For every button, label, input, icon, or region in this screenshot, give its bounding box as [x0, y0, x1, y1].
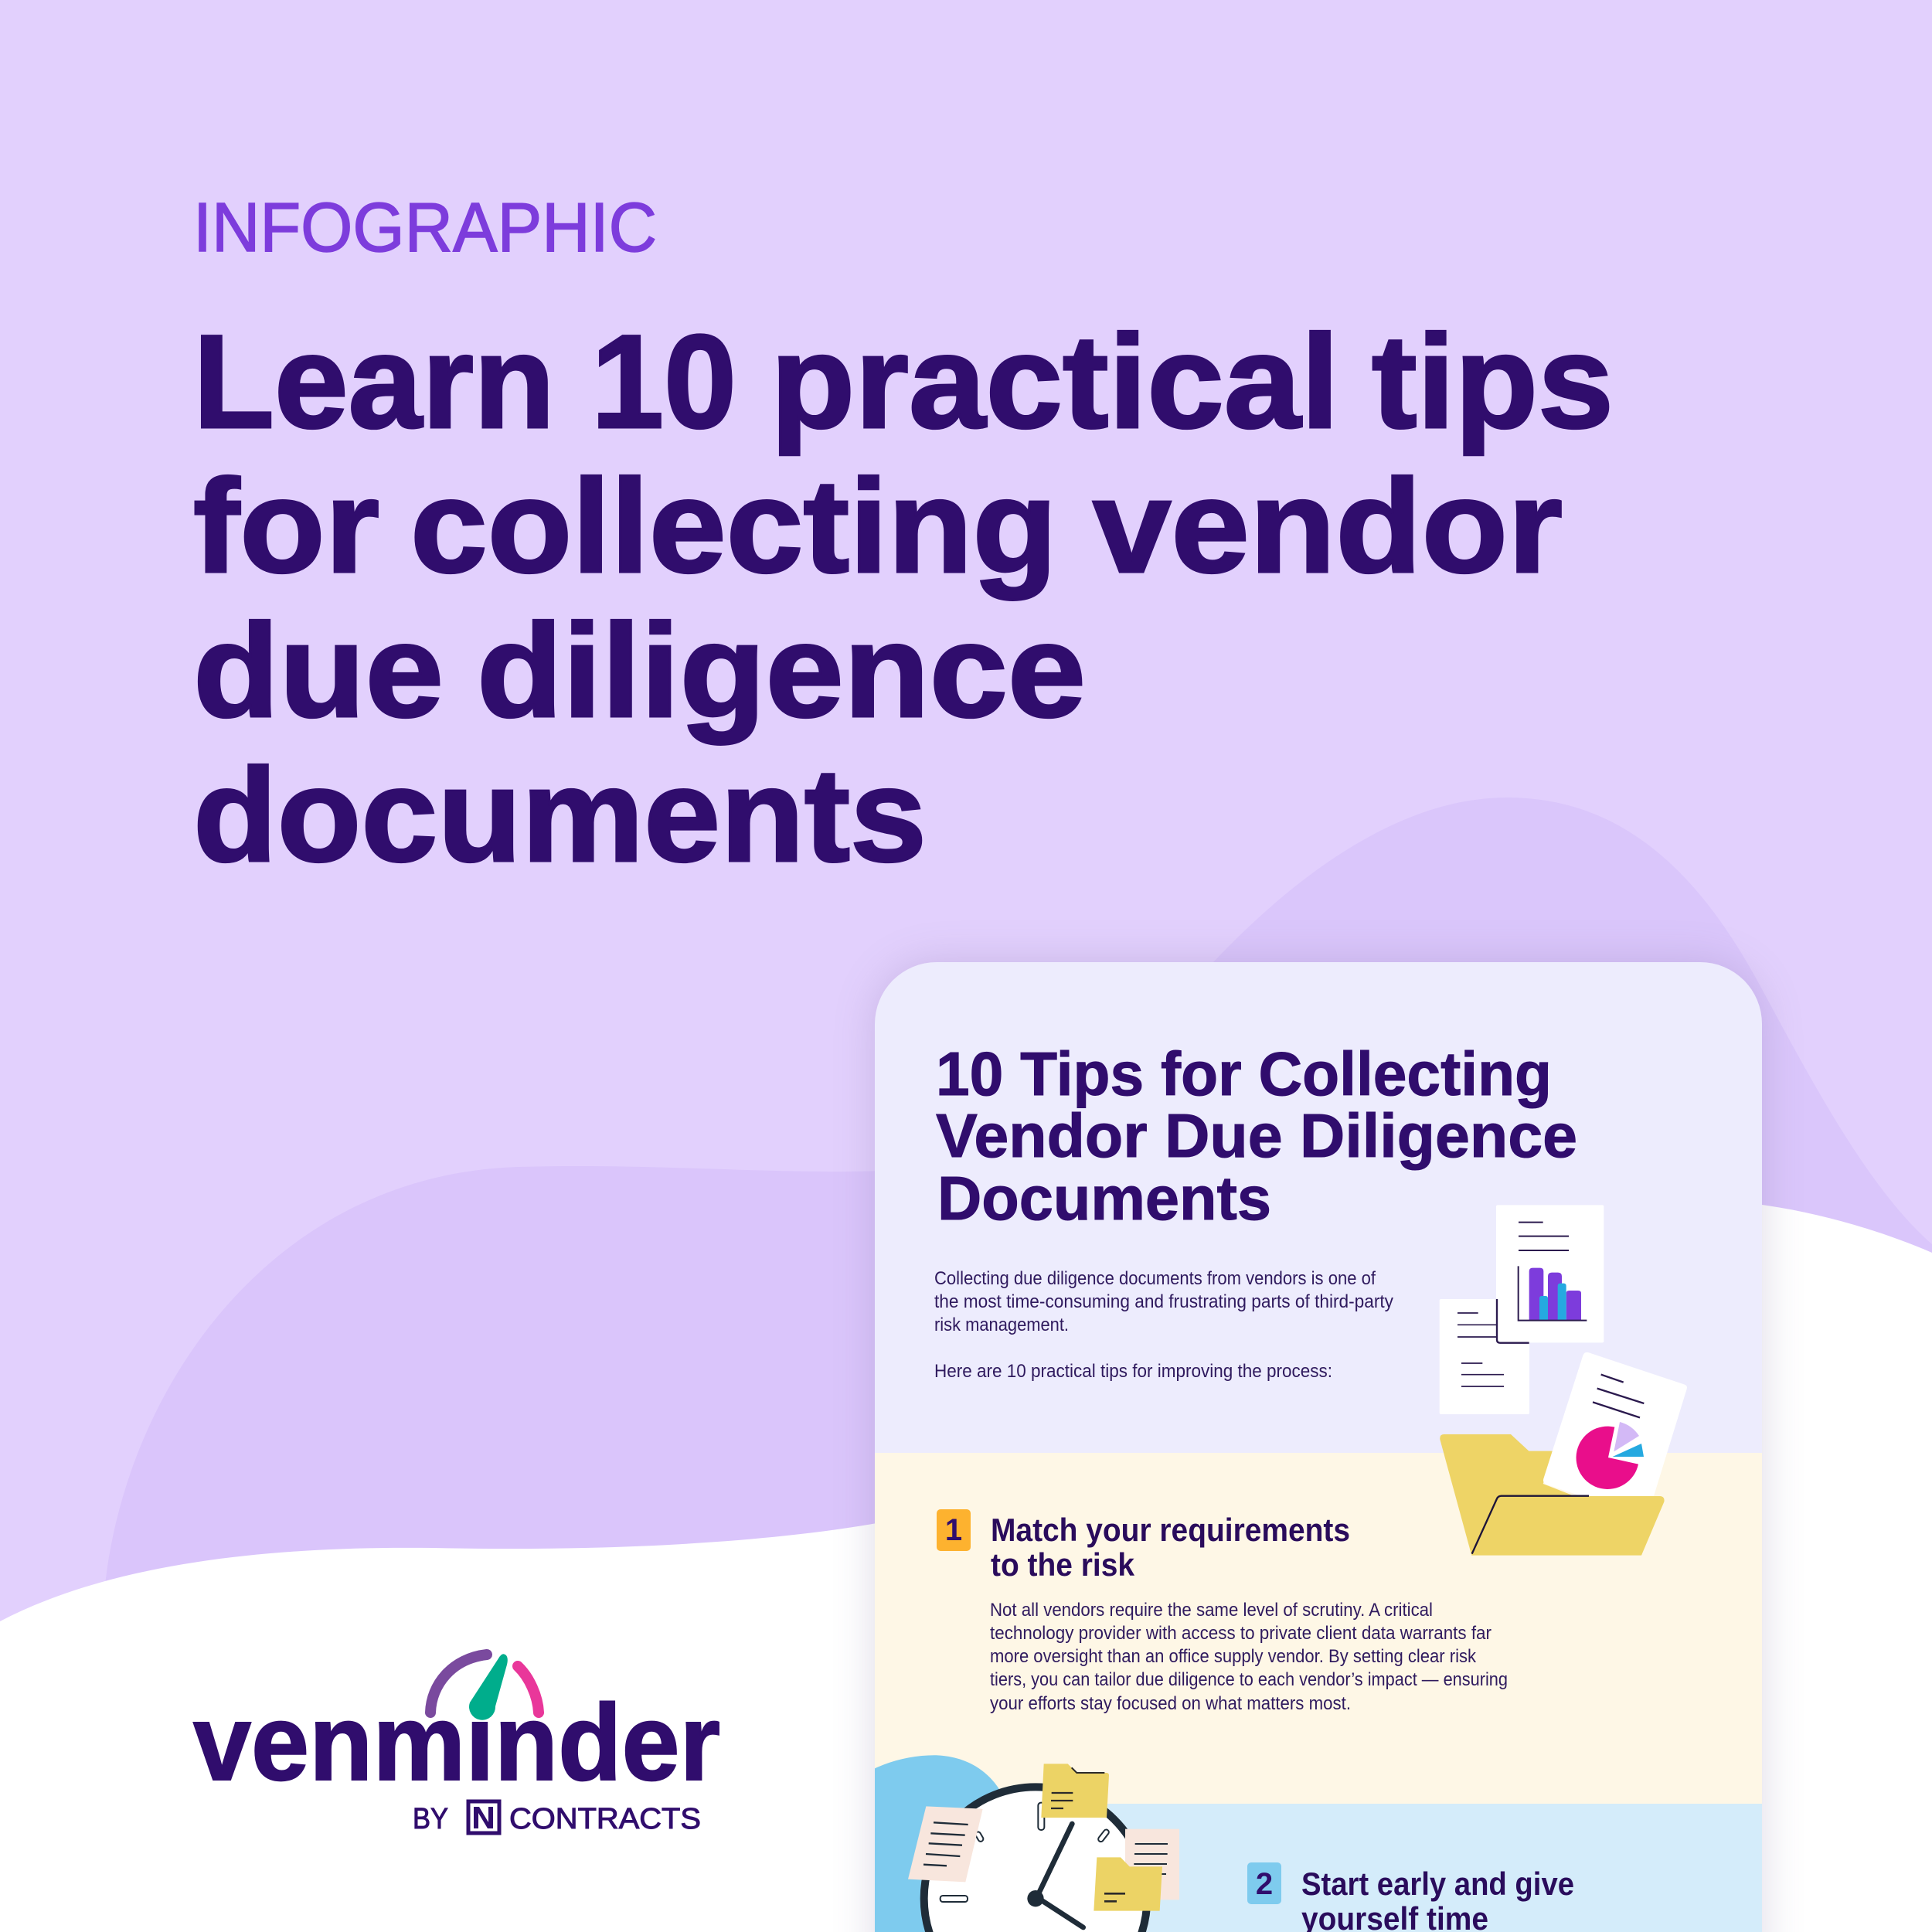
- main title: [193, 308, 1614, 889]
- intro text: the most time-consuming and frustrating parts of third-party: [934, 1291, 1393, 1312]
- tip 1 body text: tiers, you can tailor due diligence to each vendor’s impact — ensuring: [990, 1669, 1508, 1690]
- tip 1 heading: to the risk: [991, 1546, 1135, 1583]
- blue blob: [875, 1755, 1007, 1932]
- main title: diligence: [477, 597, 1086, 745]
- panel: tip 2 section: [1107, 1804, 1762, 1932]
- tip 1 heading: [991, 1518, 1349, 1577]
- eyebrow label: INFOGRAPHIC: [193, 189, 657, 267]
- tip 2 badge: [1247, 1862, 1281, 1904]
- tip 1 body text: more oversight than an office supply vendor. By setting clear risk: [990, 1646, 1477, 1667]
- icon: text document: [1440, 1299, 1529, 1414]
- main title: practical: [770, 308, 1339, 456]
- logo byline: CONTRACTS: [509, 1803, 701, 1835]
- logo byline: [413, 1801, 701, 1835]
- main title: due: [193, 597, 444, 745]
- icon: folder front: [1471, 1496, 1665, 1556]
- tip 1 badge: [937, 1509, 971, 1551]
- top folder: [1041, 1764, 1109, 1818]
- icon: folder back: [1440, 1434, 1579, 1555]
- main title: documents: [193, 741, 927, 889]
- main title: tips: [1372, 308, 1614, 456]
- intro text: [934, 1268, 1393, 1382]
- main title: for: [193, 452, 379, 600]
- tip 1 heading: Match your requirements: [991, 1512, 1350, 1548]
- intro text: risk management.: [934, 1315, 1069, 1335]
- tip 1 badge: 1: [945, 1513, 962, 1547]
- tip 1 body text: your efforts stay focused on what matters most.: [990, 1693, 1351, 1714]
- tip 2 heading: Start early and give: [1301, 1866, 1574, 1902]
- tip 1 body text: Not all vendors require the same level of scrutiny. A critical: [990, 1600, 1433, 1621]
- left note: [908, 1806, 983, 1882]
- intro text: Collecting due diligence documents from vendors is one of: [934, 1268, 1376, 1289]
- logo gauge: [430, 1654, 539, 1720]
- icon: bar chart document: [1496, 1205, 1604, 1343]
- main title: Learn: [193, 308, 555, 456]
- main title: 10: [591, 308, 736, 456]
- logo wordmark: venminder: [193, 1682, 720, 1803]
- tip 2 badge: 2: [1256, 1867, 1273, 1901]
- tip 1 body text: [990, 1600, 1508, 1714]
- tip 2 heading: [1301, 1866, 1574, 1932]
- panel: infographic preview card: [875, 962, 1762, 1932]
- clock: [924, 1787, 1147, 1932]
- card title: 10 Tips for Collecting: [936, 1039, 1552, 1108]
- card title: [935, 1049, 1576, 1221]
- tip 1 body text: technology provider with access to private client data warrants far: [990, 1623, 1492, 1644]
- icon: documents and folder illustration: [1440, 1205, 1687, 1556]
- intro text: Here are 10 practical tips for improving the process:: [934, 1361, 1332, 1382]
- panel: intro section: [875, 962, 1762, 1453]
- icon: clock with documents illustration: [875, 1755, 1179, 1932]
- logo: venminder by Ncontracts: [193, 1654, 720, 1835]
- panel: tip 1 section: [875, 1453, 1762, 1804]
- logo byline: BY: [413, 1803, 448, 1835]
- lower folder: [1094, 1857, 1162, 1911]
- main title: collecting: [410, 452, 1057, 600]
- card title: Vendor Due Diligence: [936, 1101, 1577, 1170]
- main title: vendor: [1093, 452, 1563, 600]
- icon: pie chart document: [1543, 1352, 1687, 1505]
- right note: [1125, 1829, 1179, 1900]
- card title: Documents: [937, 1164, 1271, 1233]
